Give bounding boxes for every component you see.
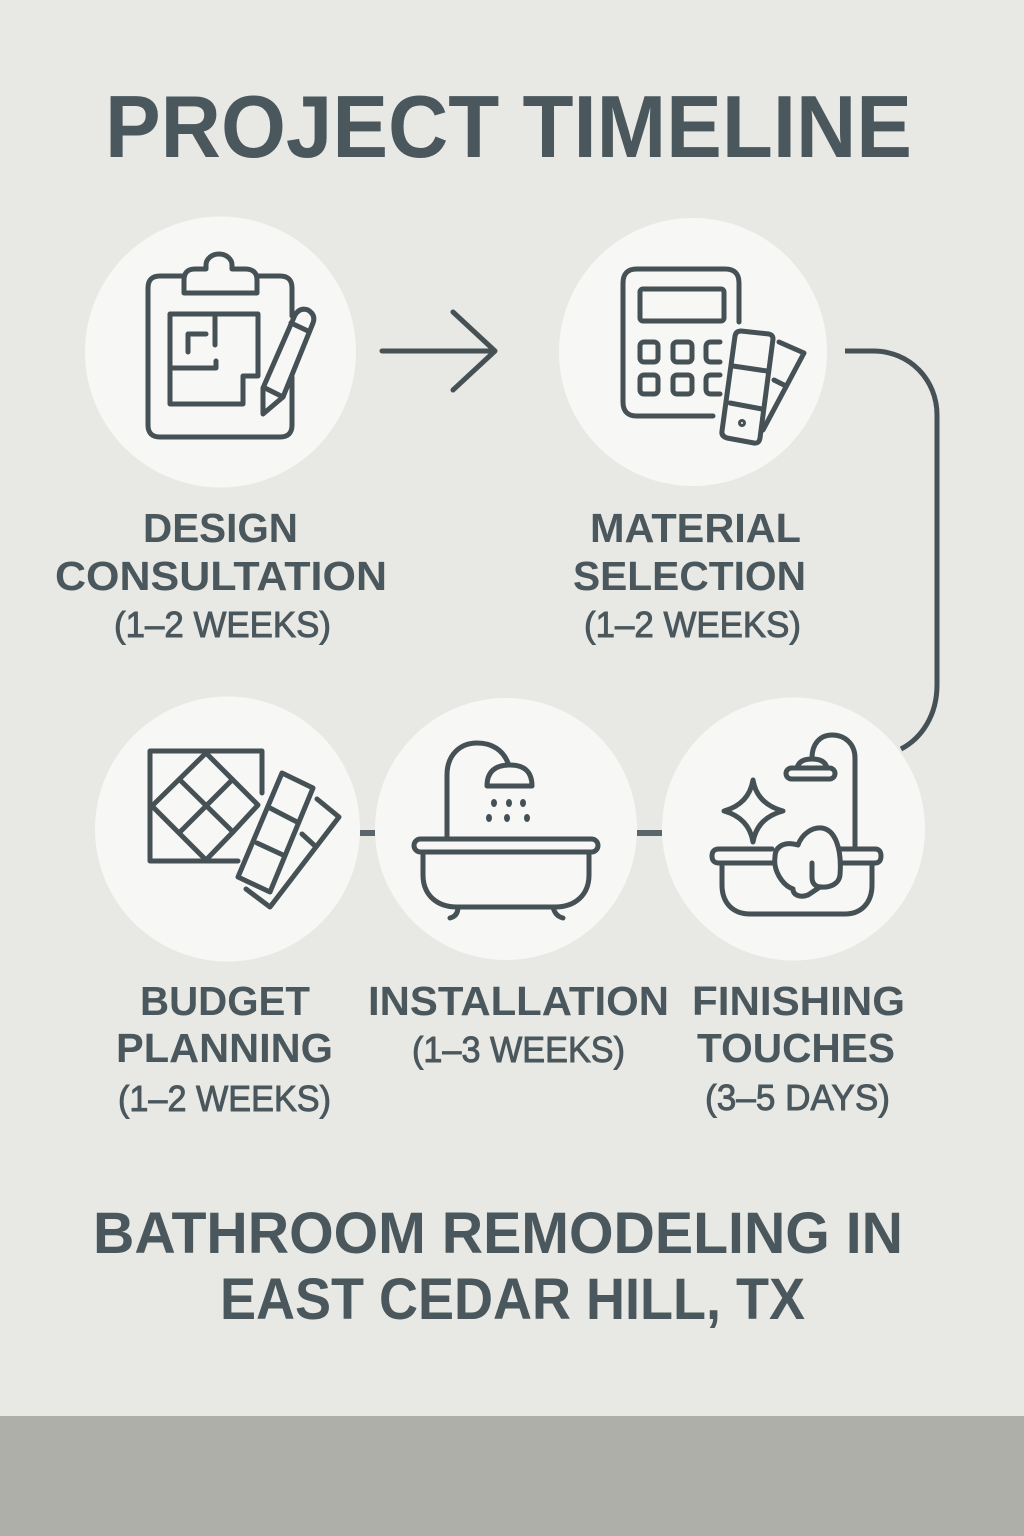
label: (1–3 WEEKS) [412, 1029, 625, 1070]
icon: water drops [486, 799, 530, 822]
icon: bathtub with shower [414, 743, 598, 918]
circle [95, 696, 360, 962]
icon: clipboard with floor plan and pencil [148, 254, 314, 437]
label: (1–2 WEEKS) [584, 604, 801, 645]
label [368, 978, 669, 1070]
connector: material selection to finishing touches [845, 351, 937, 749]
step: finishing touches [662, 698, 925, 1118]
subtitle: BATHROOM REMODELING IN [93, 1201, 903, 1266]
label [692, 978, 905, 1118]
label: CONSULTATION [55, 553, 387, 599]
icon: sparkling tub with sponge [712, 735, 881, 914]
label: (1–2 WEEKS) [114, 604, 331, 645]
arrow: design consultation to material selection [382, 312, 495, 390]
label: INSTALLATION [368, 978, 669, 1024]
step: budget planning [95, 696, 360, 1119]
label: DESIGN [143, 505, 298, 551]
circle [559, 218, 827, 486]
subtitle: EAST CEDAR HILL, TX [220, 1267, 805, 1332]
label: (1–2 WEEKS) [118, 1078, 331, 1119]
step: design consultation [55, 216, 387, 645]
label: FINISHING [692, 978, 905, 1024]
label: MATERIAL [590, 505, 801, 551]
circle [662, 698, 925, 960]
icon: tile sample with swatches [150, 751, 339, 907]
subtitle [93, 1201, 903, 1332]
label: SELECTION [573, 553, 806, 599]
label: PLANNING [116, 1025, 333, 1071]
step: material selection [559, 218, 827, 645]
label [573, 505, 806, 645]
title: PROJECT TIMELINE [105, 77, 912, 176]
label: BUDGET [140, 978, 310, 1024]
circle [85, 216, 356, 488]
label [116, 978, 333, 1119]
circle [375, 698, 637, 960]
step: installation [368, 698, 669, 1070]
connector: budget planning to installation [360, 830, 375, 836]
label [55, 505, 387, 645]
footer band [0, 1416, 1024, 1536]
label: TOUCHES [697, 1025, 895, 1071]
connector: installation to finishing touches [637, 830, 662, 836]
icon: calculator with colour swatches [623, 269, 804, 443]
label: (3–5 DAYS) [705, 1077, 890, 1118]
